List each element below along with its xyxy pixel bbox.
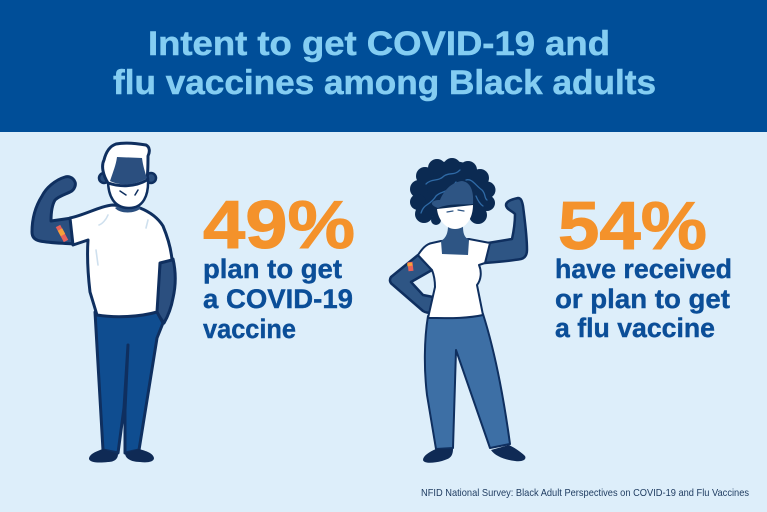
flu caption: have received [555, 254, 732, 284]
COVID-19 caption: plan to get [203, 254, 342, 284]
COVID-19 caption: vaccine [203, 314, 296, 344]
54 percent: 54% [558, 188, 707, 264]
title [113, 25, 656, 102]
woman's shoes [423, 445, 525, 463]
man's lowered arm [156, 259, 175, 323]
COVID-19 caption: a COVID-19 [203, 284, 353, 314]
woman's neck and neckline [441, 226, 469, 255]
man's hair [103, 143, 149, 186]
bandage [58, 226, 66, 241]
man's eyes [120, 190, 138, 195]
statistic: flu vaccine [555, 188, 732, 343]
woman's left arm [390, 255, 433, 313]
man's raised arm [32, 177, 75, 244]
woman's blouse [418, 239, 490, 318]
man's visor shadow [110, 157, 147, 184]
title: Intent to get COVID-19 and [148, 25, 610, 63]
man's face [108, 178, 148, 208]
flu caption: a flu vaccine [555, 313, 715, 343]
woman's curly hair [410, 158, 496, 225]
woman's face [437, 205, 473, 229]
woman's eyes [447, 210, 464, 212]
49 percent: 49% [203, 187, 355, 263]
bandage [410, 262, 411, 271]
man's shoes [89, 449, 154, 463]
flu caption: or plan to get [555, 284, 730, 314]
header band with title [0, 0, 767, 132]
illustration: man flexing arm [32, 143, 175, 463]
shirt folds [96, 215, 148, 265]
man's neck [115, 204, 141, 212]
title: flu vaccines among Black adults [113, 64, 656, 102]
statistic: COVID-19 vaccine [203, 187, 355, 344]
woman's right arm [485, 198, 527, 263]
COVID-19 caption [203, 254, 353, 344]
woman's trousers [425, 314, 510, 449]
man's trousers [95, 312, 163, 453]
man's T-shirt [70, 205, 172, 317]
man's ears [99, 173, 109, 183]
woman's fringe [432, 181, 473, 208]
flu caption [555, 254, 732, 343]
hair curls [421, 170, 487, 213]
illustration: woman flexing arm [390, 158, 527, 463]
